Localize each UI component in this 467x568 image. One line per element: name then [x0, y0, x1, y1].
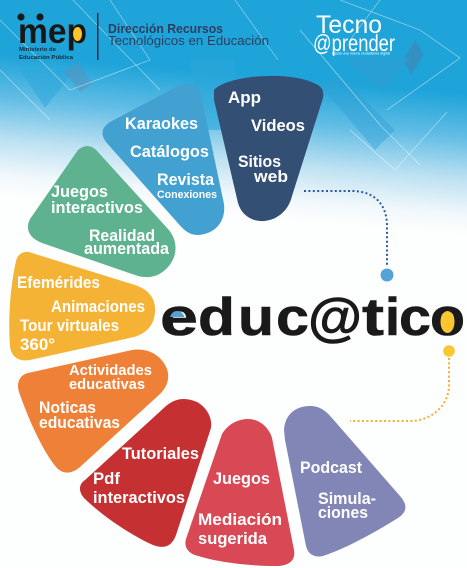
- petal: orange: Actividades: [69, 362, 152, 379]
- petal: navy: [214, 76, 323, 221]
- wordmark: educ@tico: u: [238, 288, 274, 347]
- petal: purple: Simula-: [318, 490, 376, 508]
- petal: light blue: Conexiones: [157, 189, 217, 201]
- logo: Tecno @prender: [313, 11, 395, 56]
- petal: purple: Podcast: [300, 459, 362, 477]
- petal: light blue: [103, 83, 224, 235]
- petal: red: Tutoriales: [122, 445, 199, 463]
- divider and organisation name: [97, 13, 269, 60]
- connector: yellow dotted line: [350, 345, 455, 421]
- logo: Tecno @prender: Hacia una nueva ciudadanía digital: [332, 52, 390, 56]
- logo: mep: Educación Pública: [19, 55, 74, 61]
- petal: yellow: [9, 252, 155, 360]
- petal: light blue: Catálogos: [130, 143, 209, 161]
- wordmark: educ@tico: i: [385, 288, 400, 347]
- petal: green: Juegos: [51, 183, 108, 201]
- petal: yellow: Animaciones: [51, 298, 145, 316]
- petal: red: Pdf: [93, 470, 120, 488]
- petal: pink: Mediación: [198, 511, 282, 529]
- petal: green: Realidad: [89, 227, 155, 245]
- petal: yellow: Tour virtuales: [20, 317, 119, 335]
- divider and organisation name: Tecnológicos en Educación: [108, 33, 269, 48]
- wordmark: educ@tico: d: [198, 288, 235, 347]
- logo: mep: Ministerio de: [19, 47, 56, 53]
- petal: yellow: 360°: [20, 336, 55, 354]
- petal: navy: Videos: [251, 117, 305, 135]
- petal: green: interactivos: [51, 199, 143, 217]
- petal: navy: web: [253, 168, 288, 186]
- petal: orange: educativas: [39, 414, 120, 432]
- petal: pink: [185, 419, 294, 566]
- wordmark: educ@tico: c: [399, 288, 431, 347]
- petal: green: [28, 146, 175, 277]
- petal: pink: Juegos: [213, 470, 270, 488]
- petal: purple: [284, 406, 405, 557]
- petal: navy: Sitios: [238, 153, 281, 171]
- wordmark: educ@tico: t: [362, 288, 384, 347]
- petal: orange: educativas: [69, 376, 145, 393]
- petal: orange: Noticas: [39, 399, 96, 417]
- wordmark: educ@tico: o: [430, 288, 465, 347]
- logo: mep: mep: [18, 12, 87, 51]
- connector: blue dotted line: [304, 191, 394, 282]
- wordmark: educ@tico: c: [276, 288, 309, 347]
- logo: Tecno @prender: @prender: [313, 30, 395, 56]
- petal: green: aumentada: [84, 240, 170, 258]
- petal: light blue: Karaokes: [125, 115, 198, 133]
- wordmark: educ@tico: @: [308, 288, 362, 347]
- petal: orange: [18, 350, 168, 473]
- petal: yellow: Efemérides: [17, 274, 100, 292]
- petal: navy: App: [228, 89, 261, 107]
- petal: purple: ciones: [318, 504, 368, 522]
- logo: Tecno @prender: Tecno: [316, 11, 382, 39]
- petal: light blue: Revista: [157, 171, 215, 189]
- petal: red: [80, 399, 211, 547]
- wordmark: educ@tico: e: [160, 288, 198, 347]
- wordmark: educ@tico: [160, 288, 465, 347]
- petal: pink: sugerida: [198, 530, 268, 548]
- petal: red: interactivos: [93, 489, 185, 507]
- divider and organisation name: Dirección Recursos: [108, 21, 223, 36]
